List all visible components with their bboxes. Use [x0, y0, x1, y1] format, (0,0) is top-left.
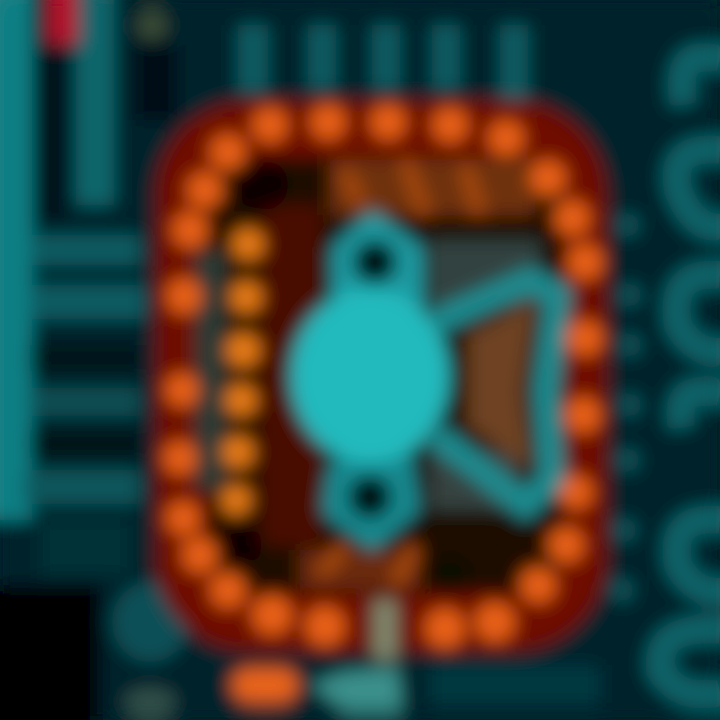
- panel: top vertical traces: [238, 25, 528, 100]
- panel: bottom teal traces: [112, 582, 600, 716]
- icon: ring orange beads: [163, 104, 603, 648]
- icon: inner column beads: [221, 228, 264, 515]
- panel: bottom left shadow: [0, 585, 100, 720]
- panel: ring interior: [207, 157, 565, 593]
- icon: bottom orange capsule: [232, 668, 298, 702]
- panel: left circuit traces: [0, 0, 177, 575]
- icon: upper interior stripes: [320, 160, 480, 585]
- icon: olive marker: [137, 10, 167, 40]
- panel: right side coils: [660, 57, 720, 694]
- icon: red marker: [48, 0, 78, 44]
- icon: bottom teal connector: [310, 600, 402, 710]
- panel: right edge dots: [610, 213, 642, 602]
- icon: cyan component: [291, 210, 558, 552]
- panel: inner details: [195, 159, 540, 595]
- panel: red ring: [155, 100, 607, 652]
